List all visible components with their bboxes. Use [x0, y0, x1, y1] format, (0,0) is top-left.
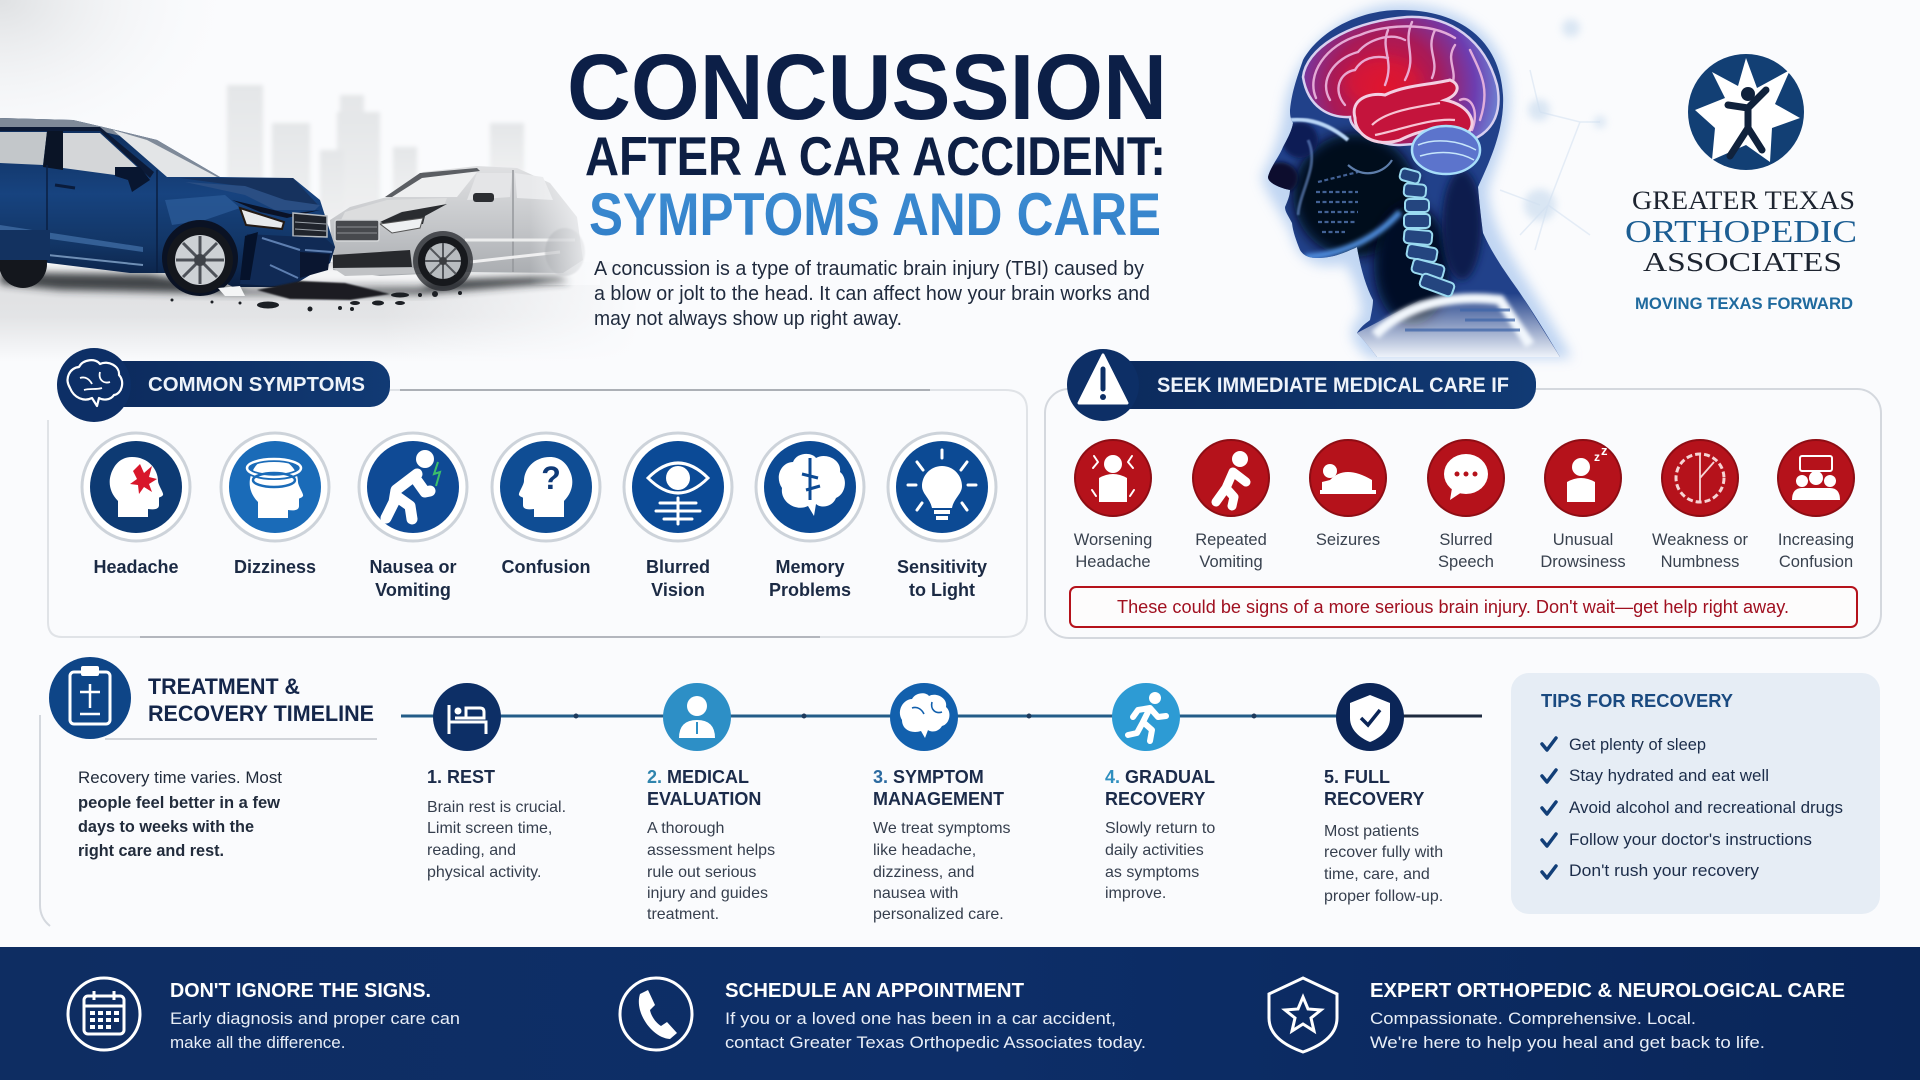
step 2: medical evaluation	[647, 683, 775, 923]
warning: repeated vomiting: Repeated	[1195, 531, 1267, 549]
symptom: nausea or vomiting: Vomiting	[375, 580, 451, 600]
warning: unusual drowsiness	[1540, 440, 1626, 571]
title: CONCUSSION	[567, 35, 1167, 139]
warning: unusual drowsiness: Drowsiness	[1540, 553, 1626, 571]
footer: schedule an appointment: If you or a loved one has been in a car accident,	[725, 1009, 1116, 1028]
heading: common symptoms: COMMON SYMPTOMS	[148, 374, 365, 396]
logo: Greater Texas Orthopedic Associates: ASSOCIATES	[1643, 247, 1842, 277]
panel: seek immediate medical care	[1045, 349, 1881, 638]
symptom: confusion: ?	[541, 460, 561, 496]
warning: worsening headache: Worsening	[1074, 531, 1152, 549]
footer: expert orthopedic and neurological care: Compassionate. Comprehensive. Local.	[1370, 1009, 1696, 1028]
footer: don't ignore the signs: make all the difference.	[170, 1033, 345, 1052]
panel: tips for recovery: Don't rush your recovery	[1569, 861, 1760, 880]
warning: unusual drowsiness: z	[1594, 450, 1600, 464]
step 5: full recovery: RECOVERY	[1324, 789, 1424, 809]
step 2: medical evaluation: 2. MEDICAL	[647, 767, 749, 787]
title	[567, 35, 1167, 248]
logo: Greater Texas Orthopedic Associates: GREATER TEXAS	[1632, 186, 1855, 215]
symptom: sensitivity to light: Sensitivity	[897, 557, 987, 577]
step 2: medical evaluation: rule out serious	[647, 864, 756, 881]
footer: don't ignore the signs: Early diagnosis and proper care can	[170, 1009, 460, 1028]
symptom: nausea or vomiting: Nausea or	[369, 557, 457, 577]
step 1: rest: Brain rest is crucial.	[427, 799, 566, 816]
warning: repeated vomiting: Vomiting	[1199, 553, 1263, 571]
footer: expert orthopedic and neurological care	[1269, 978, 1845, 1052]
footer: expert orthopedic and neurological care: EXPERT ORTHOPEDIC & NEUROLOGICAL CARE	[1370, 980, 1845, 1002]
footer: don't ignore the signs: DON'T IGNORE THE SIGNS.	[170, 980, 431, 1002]
step 1: rest: 1. REST	[427, 767, 495, 787]
warning: weakness or numbness: Weakness or	[1652, 531, 1748, 549]
step 3: symptom management	[873, 683, 1011, 923]
symptom: confusion: Confusion	[502, 557, 590, 577]
callout: serious injury warning: These could be signs of a more serious brain injury. Don't wait—get help right away.	[1117, 597, 1789, 617]
warning: repeated vomiting	[1193, 440, 1269, 571]
step 5: full recovery	[1324, 683, 1443, 905]
step 1: rest: physical activity.	[427, 864, 541, 881]
symptom: blurred vision: Vision	[651, 580, 705, 600]
step 1: rest: reading, and	[427, 842, 516, 859]
step 2: medical evaluation: treatment.	[647, 906, 719, 923]
symptom: nausea or vomiting	[359, 433, 467, 600]
car crash photo illustration	[0, 0, 640, 362]
footer band	[0, 947, 1920, 1080]
warning: worsening headache	[1074, 440, 1152, 571]
logo: Greater Texas Orthopedic Associates: MOVING TEXAS FORWARD	[1635, 294, 1853, 313]
symptom: dizziness	[221, 433, 329, 577]
blue car	[0, 118, 335, 296]
warning: increasing confusion: Confusion	[1779, 553, 1853, 571]
intro paragraph: a blow or jolt to the head. It can affect how your brain works and	[594, 283, 1150, 305]
heading: treatment and recovery timeline: TREATMENT &	[148, 674, 300, 699]
brain and head illustration	[1260, 0, 1606, 360]
warning: weakness or numbness: Numbness	[1661, 553, 1739, 571]
intro paragraph: may not always show up right away.	[594, 308, 902, 330]
symptom: sensitivity to light: to Light	[909, 580, 975, 600]
symptom: dizziness: Dizziness	[234, 557, 316, 577]
step 5: full recovery: Most patients	[1324, 823, 1419, 840]
heading: treatment and recovery timeline: RECOVERY TIMELINE	[148, 701, 374, 726]
recovery intro text: right care and rest.	[78, 841, 224, 860]
intro paragraph: A concussion is a type of traumatic brain injury (TBI) caused by	[594, 258, 1144, 280]
step 4: gradual recovery: 4. GRADUAL	[1105, 767, 1215, 787]
warning: increasing confusion	[1778, 440, 1854, 571]
footer: don't ignore the signs	[68, 978, 460, 1052]
recovery intro text: days to weeks with the	[78, 817, 254, 836]
symptom: memory problems	[756, 433, 864, 600]
road debris	[170, 281, 462, 312]
panel: tips for recovery: Get plenty of sleep	[1569, 735, 1706, 754]
step 5: full recovery: 5. FULL	[1324, 767, 1390, 787]
step 2: medical evaluation: A thorough	[647, 820, 724, 837]
heading: seek immediate medical care: SEEK IMMEDIATE MEDICAL CARE IF	[1157, 374, 1509, 397]
symptom: blurred vision: Blurred	[646, 557, 710, 577]
warning: increasing confusion: Increasing	[1778, 531, 1854, 549]
silver car	[330, 160, 600, 291]
warning: seizures: Seizures	[1316, 531, 1380, 549]
panel: tips for recovery: Stay hydrated and eat well	[1569, 766, 1769, 785]
step 4: gradual recovery: improve.	[1105, 885, 1166, 902]
step 4: gradual recovery: as symptoms	[1105, 864, 1199, 881]
cervical spine	[1399, 168, 1455, 297]
step 3: symptom management: MANAGEMENT	[873, 789, 1004, 809]
step 2: medical evaluation: injury and guides	[647, 885, 768, 902]
symptom: headache	[82, 433, 190, 577]
title: AFTER A CAR ACCIDENT:	[585, 125, 1166, 187]
logo: Greater Texas Orthopedic Associates: ORTHOPEDIC	[1625, 213, 1857, 249]
warning: unusual drowsiness: z	[1601, 443, 1608, 458]
warning: slurred speech	[1428, 440, 1504, 571]
step 4: gradual recovery: RECOVERY	[1105, 789, 1205, 809]
symptom: headache: Headache	[93, 557, 179, 577]
step 5: full recovery: proper follow-up.	[1324, 888, 1443, 905]
step 4: gradual recovery: Slowly return to	[1105, 820, 1215, 837]
step 5: full recovery: time, care, and	[1324, 866, 1430, 883]
warning: seizures	[1310, 440, 1386, 549]
heading: treatment and recovery timeline	[49, 657, 377, 739]
panel: tips for recovery: TIPS FOR RECOVERY	[1541, 690, 1734, 711]
recovery intro text	[78, 768, 282, 860]
step 2: medical evaluation: assessment helps	[647, 842, 775, 859]
step 1: rest	[427, 683, 566, 881]
warning: slurred speech: Slurred	[1439, 531, 1493, 549]
intro paragraph	[594, 258, 1150, 330]
symptom: memory problems: Problems	[769, 580, 851, 600]
warning: slurred speech: Speech	[1438, 553, 1494, 571]
callout: serious injury warning	[1070, 587, 1857, 627]
step 3: symptom management: We treat symptoms	[873, 820, 1011, 837]
symptom: blurred vision	[624, 433, 732, 600]
symptom: sensitivity to light	[888, 433, 996, 600]
footer: schedule an appointment: contact Greater Texas Orthopedic Associates today.	[725, 1033, 1146, 1052]
logo mark	[1688, 54, 1804, 170]
warning: worsening headache: Headache	[1075, 553, 1151, 571]
step 4: gradual recovery	[1105, 683, 1215, 902]
panel: tips for recovery	[1511, 673, 1880, 914]
warning: weakness or numbness	[1652, 440, 1748, 571]
recovery intro text: Recovery time varies. Most	[78, 768, 282, 787]
panel: common symptoms	[48, 348, 1027, 637]
recovery intro text: people feel better in a few	[78, 793, 281, 812]
step 5: full recovery: recover fully with	[1324, 844, 1443, 861]
logo: Greater Texas Orthopedic Associates	[1625, 54, 1857, 313]
step 3: symptom management: personalized care.	[873, 906, 1004, 923]
symptom: memory problems: Memory	[775, 557, 845, 577]
warning: unusual drowsiness: Unusual	[1553, 531, 1613, 549]
step 3: symptom management: dizziness, and	[873, 864, 974, 881]
heading: seek immediate medical care	[1067, 349, 1536, 421]
panel: tips for recovery: Avoid alcohol and recreational drugs	[1569, 798, 1843, 817]
heading: common symptoms	[57, 348, 390, 422]
step 3: symptom management: 3. SYMPTOM	[873, 767, 984, 787]
panel: tips for recovery: Follow your doctor's instructions	[1569, 830, 1812, 849]
panel: treatment and recovery timeline	[40, 657, 1482, 926]
step 2: medical evaluation: EVALUATION	[647, 789, 761, 809]
footer: schedule an appointment	[620, 978, 1146, 1052]
step 1: rest: Limit screen time,	[427, 820, 552, 837]
symptom: confusion	[492, 433, 600, 577]
title: SYMPTOMS AND CARE	[589, 181, 1161, 248]
step 3: symptom management: nausea with	[873, 885, 958, 902]
step 3: symptom management: like headache,	[873, 842, 976, 859]
footer: schedule an appointment: SCHEDULE AN APPOINTMENT	[725, 980, 1024, 1002]
footer: expert orthopedic and neurological care: We're here to help you heal and get back to life.	[1370, 1033, 1765, 1052]
step 4: gradual recovery: daily activities	[1105, 842, 1204, 859]
